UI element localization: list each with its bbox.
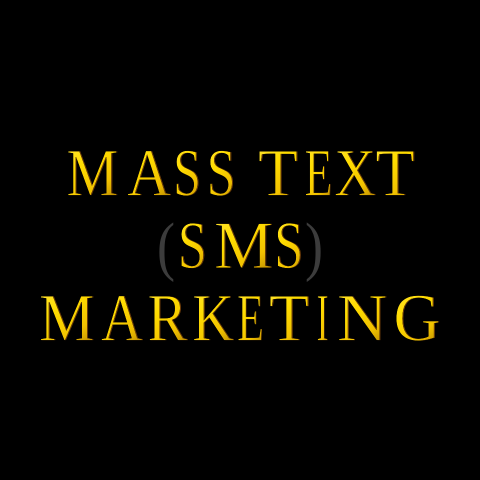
- heading line: MARKETING: R: [147, 280, 188, 355]
- heading line: (SMS): S: [178, 209, 207, 284]
- heading line: (SMS): S: [274, 209, 303, 284]
- heading line: (SMS): M: [214, 207, 273, 283]
- heading line: MASS TEXT: S: [206, 136, 236, 211]
- heading line: MASS TEXT: [66, 134, 415, 211]
- heading line: MARKETING: M: [39, 281, 95, 356]
- heading line: (SMS): [157, 207, 323, 284]
- heading line: MASS TEXT: E: [304, 135, 333, 211]
- heading line: MARKETING: G: [393, 281, 441, 356]
- heading line: MARKETING: E: [237, 281, 264, 356]
- heading line: (SMS): ): [305, 210, 323, 283]
- heading line: MARKETING: [39, 279, 441, 356]
- heading line: MASS TEXT: M: [66, 134, 118, 211]
- heading line: MARKETING: K: [192, 280, 234, 356]
- heading line: MARKETING: T: [269, 281, 309, 356]
- heading line: MARKETING: N: [337, 279, 387, 355]
- heading line: MASS TEXT: T: [258, 136, 298, 211]
- heading line: MARKETING: I: [316, 280, 329, 355]
- heading line: MASS TEXT: A: [127, 135, 171, 210]
- heading line: MASS TEXT: X: [334, 135, 376, 211]
- heading line: MASS TEXT: S: [173, 135, 201, 210]
- heading line: MARKETING: A: [101, 280, 143, 356]
- heading line: (SMS): (: [157, 210, 175, 283]
- heading line: MASS TEXT: T: [375, 136, 415, 211]
